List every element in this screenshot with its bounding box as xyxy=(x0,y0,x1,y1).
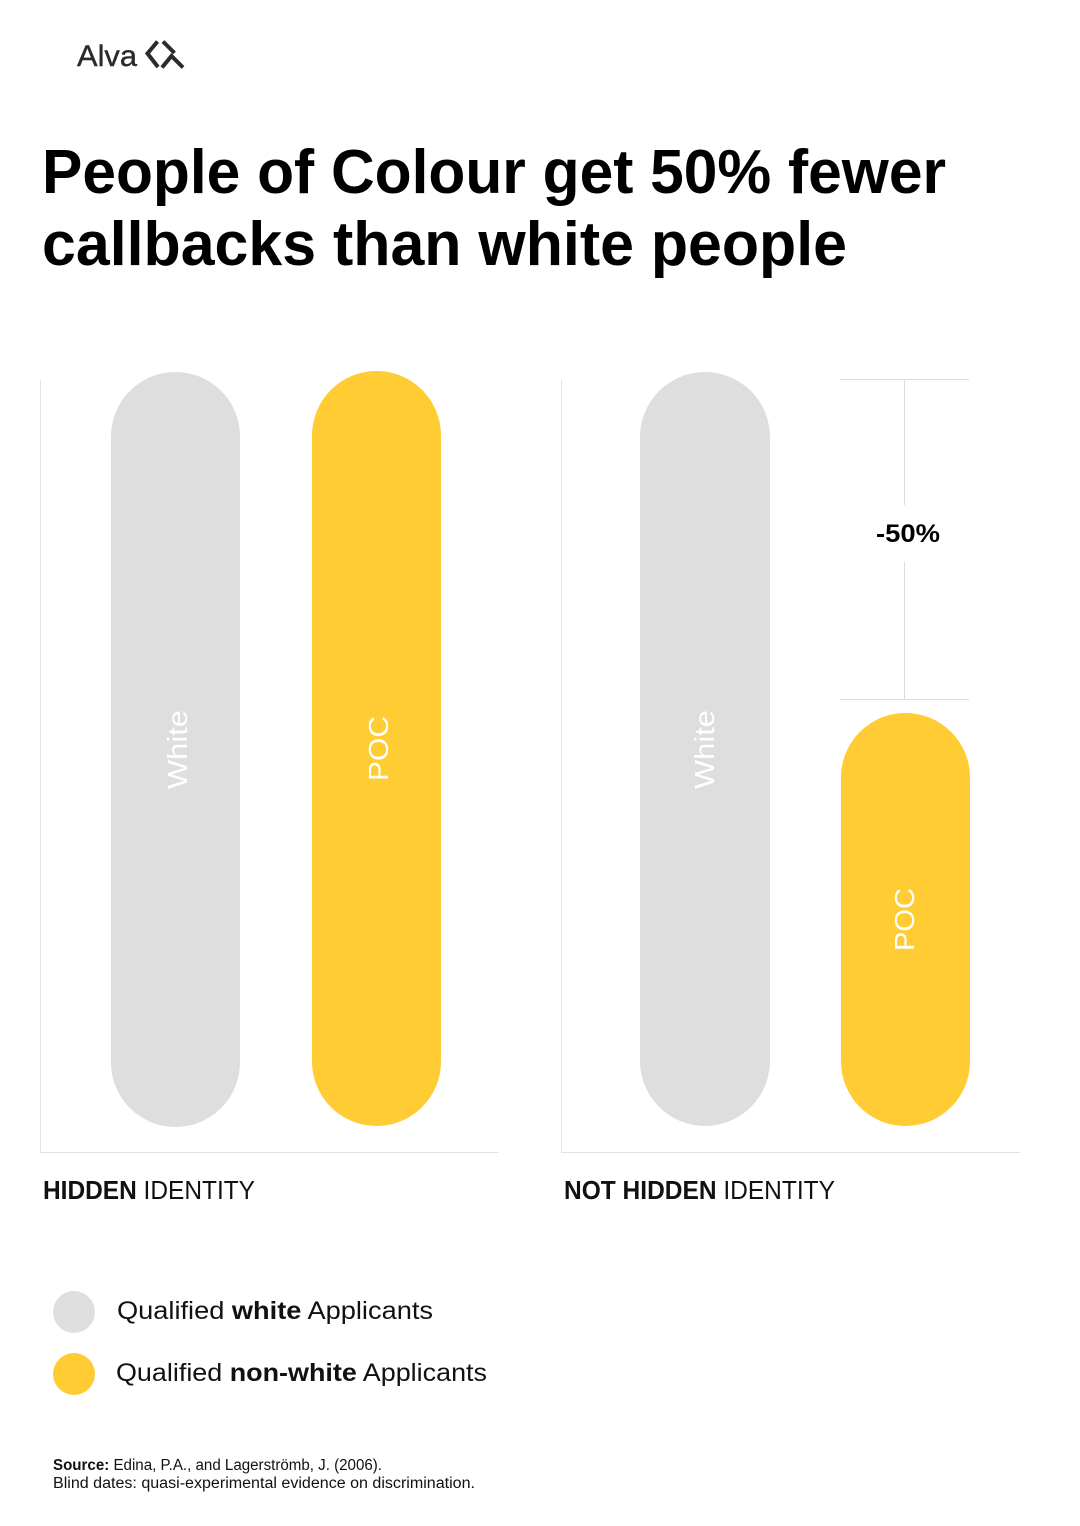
title: People of Colour get 50% fewer xyxy=(42,138,946,207)
title: callbacks than white people xyxy=(42,210,847,279)
source: Source: Edina, P.A., and Lagerströmb, J. (2006). xyxy=(53,1457,382,1474)
legend item: non-white applicants: Qualified non-white Applicants xyxy=(116,1359,487,1387)
bar: POC, hidden identity xyxy=(312,371,441,1126)
chart: hidden identity xyxy=(40,371,499,1152)
bar: POC, not hidden identity: POC xyxy=(889,888,920,951)
bar: white, not hidden identity: White xyxy=(689,710,720,789)
source: Blind dates: quasi-experimental evidence on discrimination. xyxy=(53,1475,475,1492)
bar: white, hidden identity xyxy=(111,372,240,1127)
legend item: non-white applicants xyxy=(53,1353,487,1395)
legend xyxy=(53,1291,487,1395)
callout: minus 50 percent gap xyxy=(840,380,969,700)
title xyxy=(42,138,946,279)
logo: Alva xyxy=(77,40,183,73)
logo: Alva: Alva xyxy=(77,40,137,73)
bar: POC, hidden identity: POC xyxy=(363,716,394,781)
label: not hidden identity: NOT HIDDEN IDENTITY xyxy=(564,1175,835,1205)
bar: white, not hidden identity xyxy=(640,372,770,1126)
callout: minus 50 percent gap: -50% xyxy=(876,520,940,548)
bar: POC, not hidden identity xyxy=(841,713,970,1126)
chart: not hidden identity xyxy=(562,372,1020,1152)
source xyxy=(53,1457,475,1492)
legend item: white applicants xyxy=(53,1291,433,1333)
legend item: white applicants: Qualified white Applicants xyxy=(117,1297,433,1325)
label: hidden identity: HIDDEN IDENTITY xyxy=(43,1175,255,1205)
bar: white, hidden identity: White xyxy=(162,710,193,789)
